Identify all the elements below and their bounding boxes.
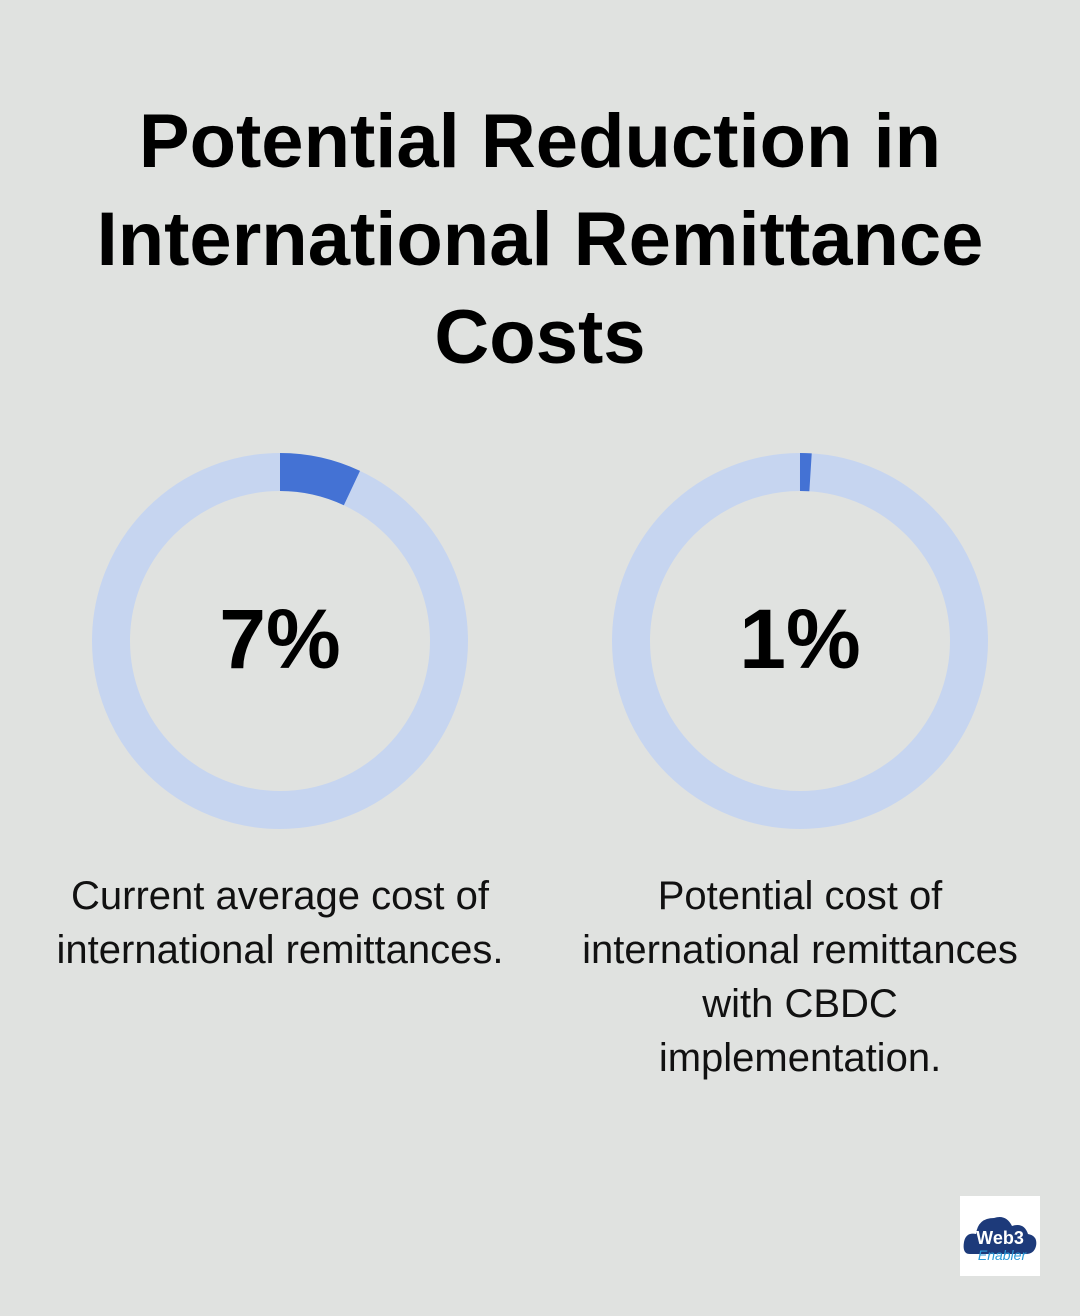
title: Costs: [434, 295, 646, 380]
donut chart: 1%: 1%: [739, 592, 861, 686]
donut chart: 1%: [612, 453, 988, 829]
donut chart: 7%: 7%: [219, 592, 341, 686]
label: potential cost: [582, 874, 1018, 1080]
title: International Remittance: [97, 197, 983, 282]
label: potential cost: Potential cost of: [658, 874, 942, 918]
label: current cost: [57, 874, 503, 972]
logo: Web3: [976, 1228, 1024, 1248]
label: current cost: international remittances.: [57, 928, 503, 972]
donut chart: 7%: [92, 453, 468, 829]
label: current cost: Current average cost of: [71, 874, 489, 918]
logo: Enabler: [978, 1247, 1027, 1263]
logo: [960, 1196, 1040, 1276]
label: potential cost: implementation.: [659, 1036, 941, 1080]
label: potential cost: with CBDC: [702, 982, 898, 1026]
title: Potential Reduction in: [139, 99, 941, 184]
title: [97, 99, 983, 380]
label: potential cost: international remittances: [582, 928, 1018, 972]
